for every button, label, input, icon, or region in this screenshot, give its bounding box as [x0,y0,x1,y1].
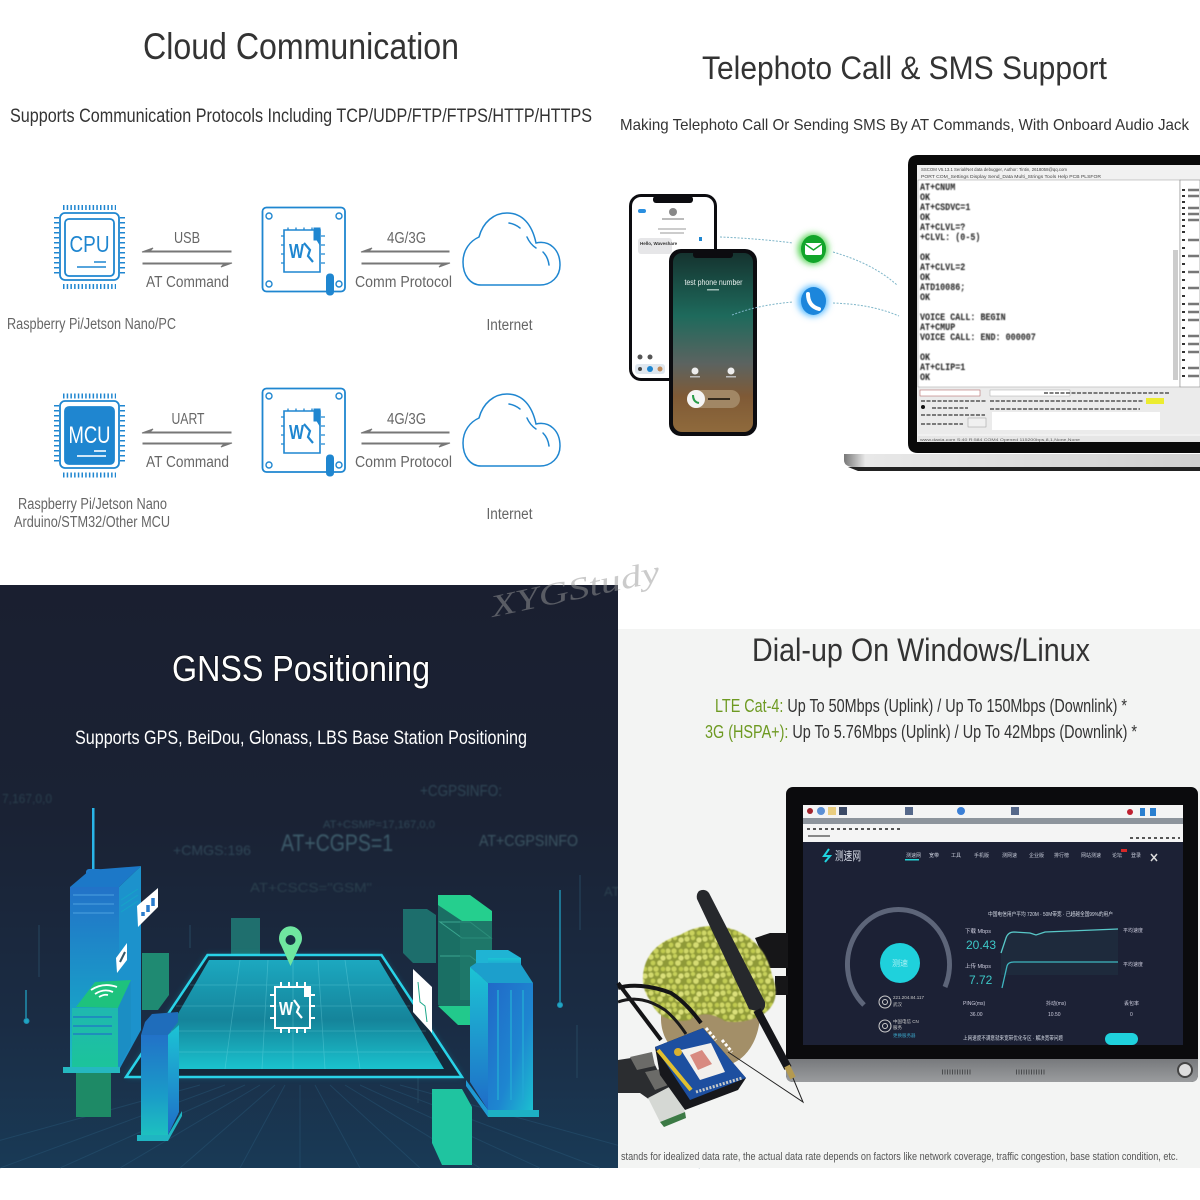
watermark: XYGStudy [485,554,663,624]
building: tall left tower [63,808,158,1073]
terminal AT command output [920,181,1036,383]
gauge: 更换服务器 [893,1032,916,1039]
speed charts: 20.43 [966,938,996,952]
ghost AT command text: AT+CGPS=1 [281,830,393,857]
speed charts: 中国电信用户平均 720M · 50M带宽 · 已超越全国99%的用户 [988,910,1113,918]
label: internet second: Internet [486,506,533,523]
terminal AT command output: AT+CLIP=1 [920,361,966,373]
connectors: dashed signal lines [720,237,899,316]
serial tool title bar: PORT COM_Settings Display Send_Data Multi_Strings Tools Help PCB PLSFOR [921,174,1102,179]
icon: location pin [279,926,302,966]
panel: telephoto call and SMS [620,50,1200,471]
title: dial-up: Dial-up On Windows/Linux [752,632,1090,668]
arrows: 4G/3G comm protocol: Comm Protocol [355,274,452,291]
icon: white chip logo on plate: W [279,999,293,1019]
title: telephoto call and SMS support: Telephoto Call & SMS Support [702,50,1107,86]
title: GNSS positioning: GNSS Positioning [172,648,430,689]
speed charts [963,910,1143,1045]
terminal AT command output: AT+CLVL=2 [920,261,966,273]
ghost AT command text: AT+CSCS="GSM" [250,880,372,895]
terminal AT command output: AT+CSDVC=1 [920,201,971,213]
ghost AT command text: AT+CGPSINFO [479,833,578,850]
arrows: 4G/3G comm protocol: 4G/3G [387,230,426,247]
decorative signal poles [24,875,580,1103]
arrows: USB AT command: AT Command [146,274,229,291]
background translucent blocks [76,909,436,1117]
arrows: UART AT command: AT Command [146,454,229,471]
speed charts: 上网速度不满意就来宽带优化专区 · 解决宽带问题 [963,1034,1063,1042]
terminal AT command output: +CLVL: (0-5) [920,231,980,243]
glowing map plate [126,955,462,1077]
speed charts: 上传 Mbps [965,962,991,970]
laptop base [844,454,1200,471]
arrows: 4G/3G comm protocol second: Comm Protocol [355,454,452,471]
gauge: 221.204.84.117 [893,995,924,1000]
icon: green message bubble [798,234,828,264]
block: lower green [432,1089,472,1165]
speed charts: 丢包率 [1124,1000,1139,1007]
ghost AT command text: AT+CSMP=17,167,0,0 [323,819,435,831]
icon: 4G module board: W [289,241,304,263]
speed test dashboard: 登录 [1131,852,1141,859]
building: right tower [466,950,539,1117]
ghost AT command text [2,783,620,899]
speed test dashboard: 工具 [951,853,961,859]
terminal AT command output: ATD10086; [920,281,965,293]
icon: cloud second [463,394,560,466]
arrows: UART AT command [142,411,232,471]
speed charts: 7.72 [969,973,993,987]
building: green shelf tower [438,895,492,1025]
monitor stand arms behind plant [755,933,788,995]
LTE speed line: LTE Cat-4: Up To 50Mbps (Uplink) / Up To 150Mbps (Downlink) * [715,696,1127,716]
speed test dashboard: 测速网 [906,852,921,859]
gauge: 中国电信 CN [893,1018,919,1025]
icon: cloud [463,213,560,285]
speed test dashboard: 手机版 [974,852,989,859]
speed charts: 10.50 [1048,1012,1061,1018]
floor perspective lines [0,1085,700,1168]
label: raspberry pi host: Raspberry Pi/Jetson Nano/PC [7,316,176,333]
label: raspberry pi and mcu hosts: Raspberry Pi/Jetson Nano [18,496,167,513]
panel: GNSS positioning [0,585,700,1168]
speed test dashboard: 企业版 [1029,852,1044,859]
panel: dial-up on windows and linux [485,554,1200,1168]
monitor [618,787,1198,1163]
icon: 4G module board second [262,388,345,476]
terminal AT command output: OK [920,251,930,263]
terminal AT command output: VOICE CALL: END: 000007 [920,331,1036,343]
icon: phone with messages: Hello, Waveshare [640,241,678,246]
speed charts: 0 [1130,1012,1133,1018]
ghost AT command text: AT [604,884,620,899]
icon: 4G module board second: W [289,422,304,444]
ghost AT command text: +CGPSINFO: [420,783,502,800]
label: internet: Internet [486,317,533,334]
icon: phone with messages [629,194,717,381]
bottom control strip [918,388,1200,442]
terminal AT command output: AT+CMUP [920,321,956,333]
building: small front tower [137,1012,182,1141]
arrows: UART AT command: UART [172,411,205,428]
arrows: 4G/3G comm protocol second [355,411,452,471]
icon: phone with incoming call: test phone number [684,278,743,287]
icon: white chip logo on plate [270,982,315,1033]
ghost AT command text: +CMGS:196 [173,842,251,858]
subtitle: positioning systems: Supports GPS, BeiDou, Glonass, LBS Base Station Positioning [75,728,527,749]
terminal AT command output: OK [920,271,930,283]
gauge: 武汉 [893,1001,902,1008]
right multi-string panel [1180,180,1200,387]
green wifi block [72,980,131,1068]
speed charts: 抖动(ms) [1046,1000,1066,1007]
speed test dashboard: 论坛 [1112,852,1122,859]
browser chrome [803,805,1183,842]
terminal AT command output: OK [920,191,930,203]
speed charts: PING(ms) [963,1001,986,1007]
speed charts: 平均速度 [1123,927,1143,934]
icon: CPU chip: CPU [70,231,110,257]
terminal AT command output: OK [920,371,930,383]
gauge: 服务 [893,1024,902,1031]
ghost AT command text: 7,167,0,0 [2,791,52,806]
terminal AT command output: OK [920,291,930,303]
floating cards [137,888,158,927]
arrows: 4G/3G comm protocol second: 4G/3G [387,411,426,428]
panel: cloud communication [7,26,592,531]
icon: MCU chip [56,396,122,475]
floating graph card [413,969,432,1033]
icon: LTE antenna [697,890,803,1102]
speed test dashboard: 测网速 [1002,852,1017,859]
serial tool title bar [921,167,1102,179]
speed test dashboard [803,842,1183,1045]
label: raspberry pi and mcu hosts [14,496,170,531]
icon: blue phone bubble [798,286,828,316]
laptop screen [908,155,1200,453]
speed test dashboard: 网站测速 [1081,852,1101,859]
gauge: 测速 [892,959,908,968]
gauge [847,909,949,1039]
title: cloud communication: Cloud Communication [143,26,459,67]
label: raspberry pi and mcu hosts: Arduino/STM32/Other MCU [14,514,170,531]
arrows: 4G/3G comm protocol [355,230,452,291]
speed test dashboard: 宽带 [929,852,939,859]
arrows: USB AT command [142,230,232,291]
bottom control strip: www.daxia.com S:40 R:584 COM4 Opened 115200bps,8,1,None,None [920,437,1081,442]
icon: phone with incoming call [669,249,757,436]
terminal AT command output: AT+CLVL=? [920,221,966,233]
icon: raspberry pi with 4G HAT [618,983,746,1127]
terminal AT command output: VOICE CALL: BEGIN [920,311,1006,323]
arrows: USB AT command: USB [174,230,200,247]
speed charts: 36.00 [970,1012,983,1018]
speed charts: 平均速度 [1123,961,1143,968]
speed test dashboard: 测速网 [835,849,861,863]
subtitle: protocols: Supports Communication Protocols Including TCP/UDP/FTP/FTPS/HTTP/HTTPS [10,106,592,127]
icon: MCU chip: MCU [68,422,110,449]
terminal AT command output: OK [920,211,930,223]
speed charts: 下载 Mbps [965,927,991,935]
serial tool title bar: SSCOM V5.13.1 Serial/Net data debugger, Author: Tintin, 2618058@qq.com [921,167,1067,172]
icon: CPU chip [56,208,122,286]
icon: 4G module board [262,208,345,295]
terminal AT command output: OK [920,351,930,363]
terminal AT command output: AT+CNUM [920,181,956,193]
speed test dashboard: 排行榜 [1054,852,1069,859]
icon: potted plant [643,926,776,1066]
